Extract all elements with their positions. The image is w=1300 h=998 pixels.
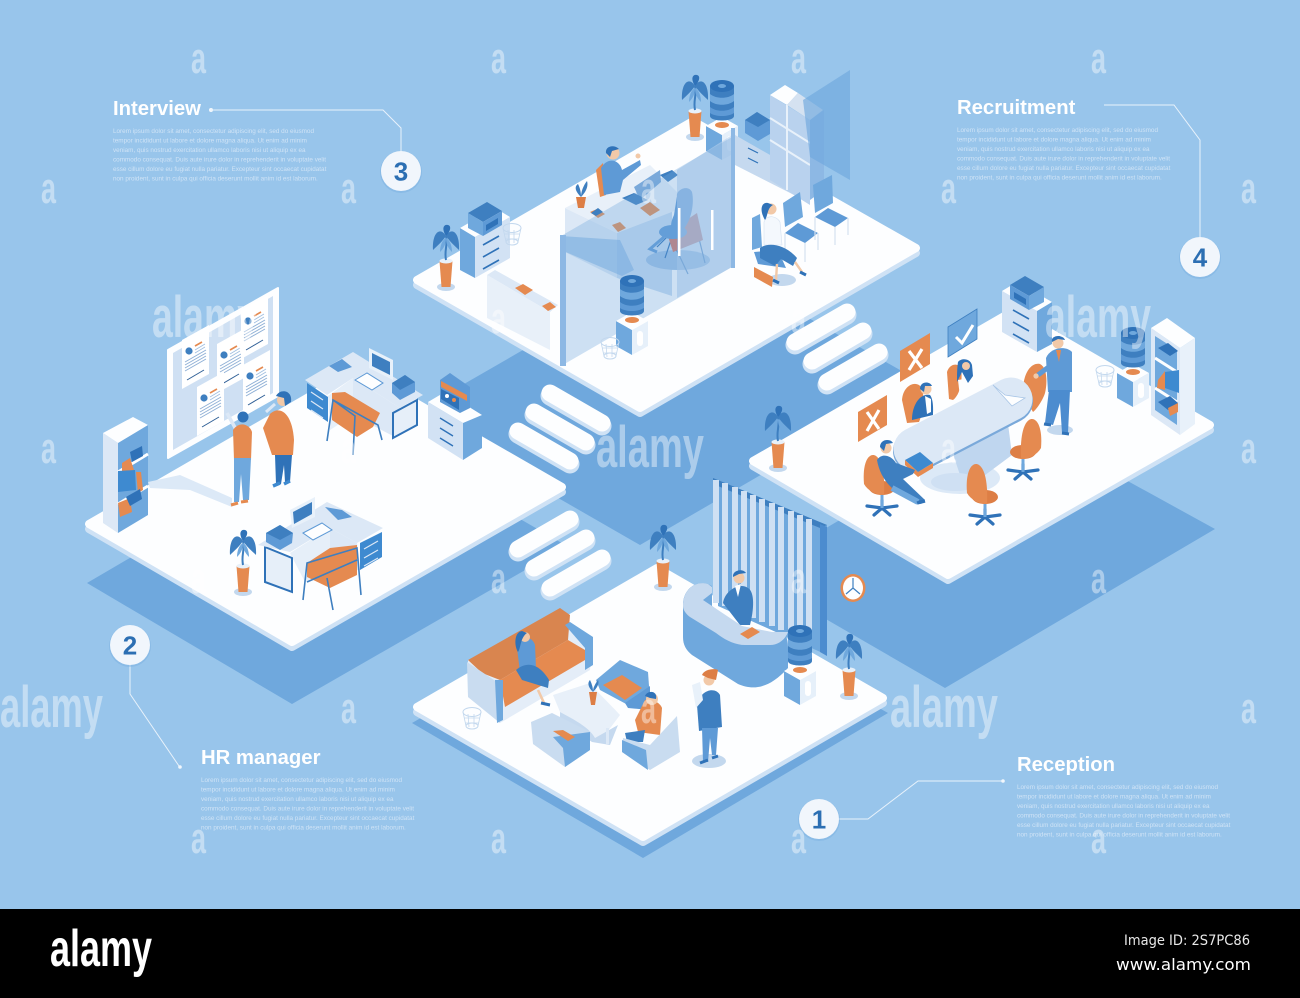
watermark: stock marks: alamy xyxy=(1045,285,1151,350)
watermark: stock marks: a xyxy=(191,814,206,863)
watermark: stock marks: alamy xyxy=(596,415,704,480)
body text: interview: veniam, quis nostrud exercitation ullamco laboris nisi ut aliquip ex ea xyxy=(113,147,306,154)
heading: Recruitment: Recruitment xyxy=(957,97,1076,119)
number badge 3 xyxy=(380,151,422,193)
watermark: stock marks: a xyxy=(791,554,806,603)
desk one xyxy=(305,348,423,455)
watermark: stock marks: a xyxy=(491,34,506,83)
plant xyxy=(765,406,791,472)
watermark: stock marks: a xyxy=(491,814,506,863)
waste bin xyxy=(1096,366,1114,387)
watermark: stock marks: alamy xyxy=(0,675,103,740)
watermark: stock marks: a xyxy=(1091,814,1106,863)
stairs: interview to recruitment xyxy=(795,312,879,385)
heading: HR manager: HR manager xyxy=(201,747,321,769)
body text: recruitment: Lorem ipsum dolor sit amet, consectetur adipiscing elit, sed do eiusmod xyxy=(957,127,1158,134)
floor slab xyxy=(753,311,1210,580)
body text: HR manager: tempor incididunt ut labore et dolore magna aliqua. Ut enim ad minim xyxy=(201,786,395,794)
water cooler xyxy=(1117,327,1149,407)
panel: HR manager room xyxy=(89,288,562,647)
body text: reception: non proident, sunt in culpa qui officia deserunt mollit anim id est laborum. xyxy=(1017,832,1222,838)
laptop and monitor xyxy=(622,170,678,205)
watermark: stock marks: a xyxy=(791,294,806,343)
number badge 2 xyxy=(109,625,151,667)
image id: Image ID: 2S7PC86 xyxy=(1124,933,1250,949)
watermark: stock marks: a xyxy=(641,684,656,733)
body text: reception: esse cillum dolore eu fugiat nulla pariatur. Excepteur sint occaecat cupidatat xyxy=(1017,822,1231,829)
body text: recruitment: non proident, sunt in culpa qui officia deserunt mollit anim id est laborum. xyxy=(957,174,1162,182)
watermark: stock marks: a xyxy=(1091,34,1106,83)
heading: Reception: Reception xyxy=(1017,754,1115,776)
bottom-left armchair xyxy=(531,713,590,767)
watermark: stock marks: a xyxy=(491,554,506,603)
body text: reception: tempor incididunt ut labore et dolore magna aliqua. Ut enim ad minim xyxy=(1017,794,1211,800)
glass panel behind shelving xyxy=(803,70,850,180)
sofa xyxy=(467,608,593,723)
panel: interview room xyxy=(417,70,916,413)
plant xyxy=(650,525,676,591)
body text: reception xyxy=(1017,784,1231,838)
body text: HR manager xyxy=(201,777,415,832)
callout: recruitment xyxy=(957,97,1221,279)
standing man xyxy=(1033,336,1073,435)
watermark: stock marks: a xyxy=(1241,684,1256,733)
stairs: HR manager to reception xyxy=(518,519,602,591)
plant and water cooler at back xyxy=(682,75,738,160)
callout: reception xyxy=(798,754,1231,841)
tall shelving unit xyxy=(770,85,824,205)
decision card: X xyxy=(900,333,930,382)
meeting table xyxy=(905,385,1025,494)
slatted curtain wall xyxy=(713,478,827,656)
seated woman at far side of table xyxy=(947,359,975,400)
footer logo: alamy xyxy=(50,920,152,978)
watermark: stock marks: a xyxy=(341,164,356,213)
low counter with books xyxy=(487,270,558,350)
printer cabinet xyxy=(460,202,510,278)
coffee table xyxy=(553,680,620,745)
watermark: stock marks: alamy xyxy=(152,285,258,350)
stairs: HR manager to interview xyxy=(518,393,602,464)
waste bin xyxy=(601,338,619,359)
decision card: check xyxy=(948,309,977,357)
watermark: stock marks: a xyxy=(941,164,956,213)
website: www.alamy.com xyxy=(1116,955,1251,974)
interior floor tint xyxy=(677,135,732,298)
plant xyxy=(230,530,256,596)
watermark: stock marks: a xyxy=(41,424,56,473)
interview desk xyxy=(565,165,690,296)
waiting chairs xyxy=(783,175,848,262)
waste bin xyxy=(503,224,521,245)
waiting woman with briefcase xyxy=(752,203,806,287)
standing woman with papers xyxy=(692,669,726,768)
receptionist xyxy=(723,570,753,625)
far right chair xyxy=(1023,364,1046,412)
body text: recruitment: veniam, quis nostrud exercitation ullamco laboris nisi ut aliquip ex ea xyxy=(957,146,1150,153)
potted desk plant xyxy=(576,181,587,208)
number badge 3: 3 xyxy=(394,156,408,186)
right chair xyxy=(1008,419,1041,479)
man at desk xyxy=(596,146,641,197)
right armchair xyxy=(622,716,680,770)
body text: HR manager: non proident, sunt in culpa qui officia deserunt mollit anim id est laborum. xyxy=(201,824,406,832)
watermark: stock marks: a xyxy=(341,684,356,733)
body text: HR manager: veniam, quis nostrud exercitation ullamco laboris nisi ut aliquip ex ea xyxy=(201,796,394,803)
coffee cabinet with machine xyxy=(428,373,482,460)
glass partition xyxy=(560,128,735,366)
panel: recruitment room xyxy=(753,276,1210,580)
body text: recruitment: commodo consequat. Duis aute irure dolor in reprehenderit in voluptate velit xyxy=(957,156,1170,162)
body text: reception: veniam, quis nostrud exercitation ullamco laboris nisi ut aliquip ex ea xyxy=(1017,803,1210,810)
body text: reception: commodo consequat. Duis aute irure dolor in reprehenderit in voluptate velit xyxy=(1017,812,1230,820)
body text: interview: esse cillum dolore eu fugiat nulla pariatur. Excepteur sint occaecat cupidatat xyxy=(113,166,327,173)
number badge 1: 1 xyxy=(812,804,826,834)
watermark: stock marks: alamy xyxy=(890,675,998,740)
watermark: stock marks: a xyxy=(191,34,206,83)
front water cooler xyxy=(616,275,648,355)
number badge 4 xyxy=(1179,237,1221,279)
room shadows xyxy=(87,252,1215,858)
body text: recruitment: esse cillum dolore eu fugiat nulla pariatur. Excepteur sint occaecat cupidatat xyxy=(957,165,1171,172)
connector line xyxy=(130,665,182,769)
body text: interview: commodo consequat. Duis aute irure dolor in reprehenderit in voluptate velit xyxy=(113,156,326,164)
body text: recruitment xyxy=(957,127,1171,182)
callout: interview xyxy=(113,98,422,193)
drawer cabinet at back wall xyxy=(735,112,800,198)
person in orange coat at board xyxy=(263,391,294,486)
water cooler xyxy=(784,625,816,705)
watermark: stock marks: a xyxy=(191,554,206,603)
watermark: stock marks: a xyxy=(341,424,356,473)
bookshelf xyxy=(103,417,148,533)
connector line xyxy=(1104,105,1200,237)
watermark: stock marks: a xyxy=(791,34,806,83)
desk two with printer and plant xyxy=(258,497,383,610)
footer bar xyxy=(0,909,1300,998)
watermark: stock marks: a xyxy=(1091,554,1106,603)
number badge 2: 2 xyxy=(123,630,137,660)
watermark: stock marks: a xyxy=(1241,164,1256,213)
floor slab xyxy=(417,121,916,413)
person with vest at board xyxy=(227,412,252,505)
callout: HR manager xyxy=(109,625,415,832)
plant xyxy=(836,634,862,700)
seated woman on sofa xyxy=(515,631,550,705)
connector line xyxy=(209,108,401,152)
watermark: stock marks: a xyxy=(941,424,956,473)
body text: interview: Lorem ipsum dolor sit amet, consectetur adipiscing elit, sed do eiusmod xyxy=(113,128,314,135)
waste bin xyxy=(463,708,481,729)
heading: Interview: Interview xyxy=(113,98,201,120)
body text: interview: non proident, sunt in culpa qui officia deserunt mollit anim id est laborum. xyxy=(113,176,318,182)
watermark: stock marks: a xyxy=(791,814,806,863)
body text: interview xyxy=(113,128,327,182)
body text: HR manager: Lorem ipsum dolor sit amet, consectetur adipiscing elit, sed do eiusmod xyxy=(201,777,402,784)
watermark: stock marks: a xyxy=(1241,424,1256,473)
seated man in right armchair xyxy=(625,692,662,742)
printer cabinet xyxy=(1002,276,1052,352)
floor slab xyxy=(89,369,562,647)
body text: recruitment: tempor incididunt ut labore et dolore magna aliqua. Ut enim ad minim xyxy=(957,136,1151,144)
front chair xyxy=(967,464,1000,524)
floor shadow, woman and chair seen through glass xyxy=(646,188,710,274)
number badge 1 xyxy=(798,799,840,841)
seated man left chair xyxy=(864,440,925,515)
floor shadows of people and board xyxy=(148,475,232,507)
watermark: stock marks: a xyxy=(641,164,656,213)
bookshelf xyxy=(1151,318,1195,435)
reception desk xyxy=(683,583,788,687)
body text: HR manager: esse cillum dolore eu fugiat nulla pariatur. Excepteur sint occaecat cupidatat xyxy=(201,815,415,822)
top-right armchair xyxy=(596,660,650,710)
decision card: X xyxy=(858,395,887,442)
number badge 4: 4 xyxy=(1193,242,1208,272)
candidate board xyxy=(168,288,278,458)
body text: reception: Lorem ipsum dolor sit amet, consectetur adipiscing elit, sed do eiusmod xyxy=(1017,784,1218,791)
watermark: stock marks: a xyxy=(41,164,56,213)
floor slab xyxy=(417,568,883,842)
seated man at far side of table xyxy=(902,383,933,423)
body text: interview: tempor incididunt ut labore et dolore magna aliqua. Ut enim ad minim xyxy=(113,138,307,144)
panel: reception room xyxy=(417,478,883,842)
connector line xyxy=(839,779,1005,819)
watermark: stock marks: a xyxy=(491,294,506,343)
body text: HR manager: commodo consequat. Duis aute irure dolor in reprehenderit in voluptate velit xyxy=(201,806,414,812)
plant xyxy=(433,225,459,291)
wall clock xyxy=(840,574,866,602)
